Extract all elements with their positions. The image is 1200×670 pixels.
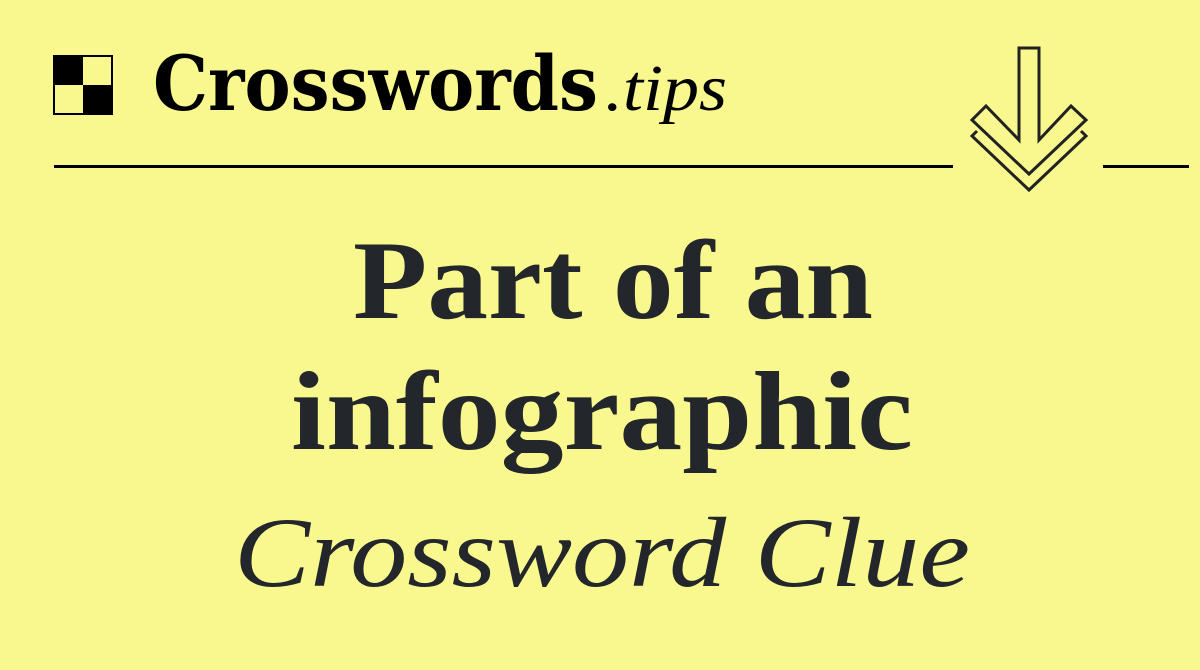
logo: [54, 39, 727, 128]
logo text: Crosswords: [153, 39, 598, 128]
title: [291, 219, 913, 474]
icon: crossword grid: [54, 56, 112, 114]
icon: down arrow: [972, 48, 1086, 190]
title: Part of an: [353, 219, 873, 343]
logo suffix: .tips: [605, 52, 727, 125]
subtitle: Crossword Clue: [234, 497, 970, 608]
divider line: [54, 165, 1189, 168]
title: infographic: [291, 350, 913, 474]
